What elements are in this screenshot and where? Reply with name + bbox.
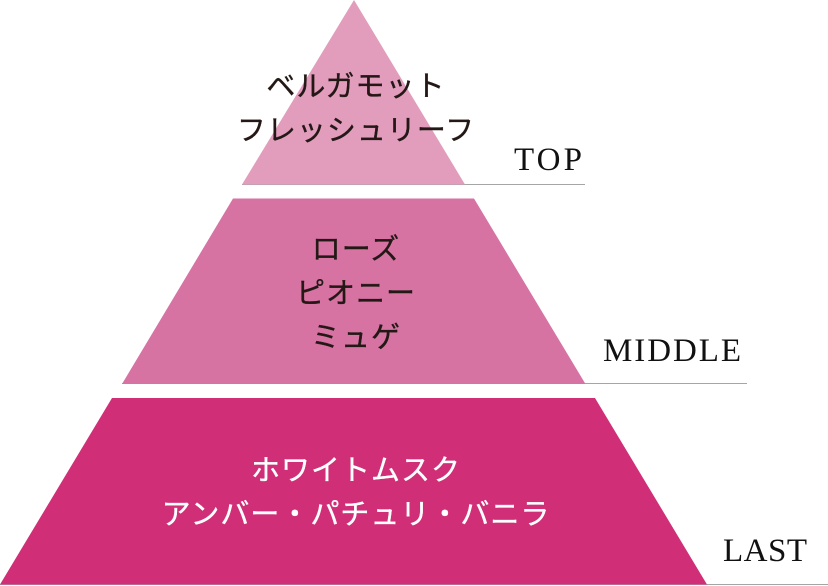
tier: last notes: アンバー・パチュリ・バニラ [162,499,550,531]
text: top notes: ベルガモット [266,71,446,103]
tier: middle notes: ピオニー [296,278,416,310]
leader line: middle [122,383,747,384]
tier: top notes: フレッシュリーフ [237,115,475,147]
tier: middle notes: ミュゲ [311,322,401,354]
text: last notes: ホワイトムスク [251,455,461,487]
trapezoid: last tier [0,398,707,584]
leader line: last [0,584,828,585]
tier: middle notes [122,198,747,384]
leader line: top [242,184,585,185]
tier: top notes [237,0,585,185]
label: MIDDLE: MIDDLE [603,333,741,369]
label: TOP: TOP [514,142,582,178]
triangle: top tier [242,0,465,184]
label: LAST: LAST [723,533,807,569]
text: middle notes: ローズ [312,233,400,266]
tier: last notes [0,398,828,585]
trapezoid: middle tier [122,198,586,384]
